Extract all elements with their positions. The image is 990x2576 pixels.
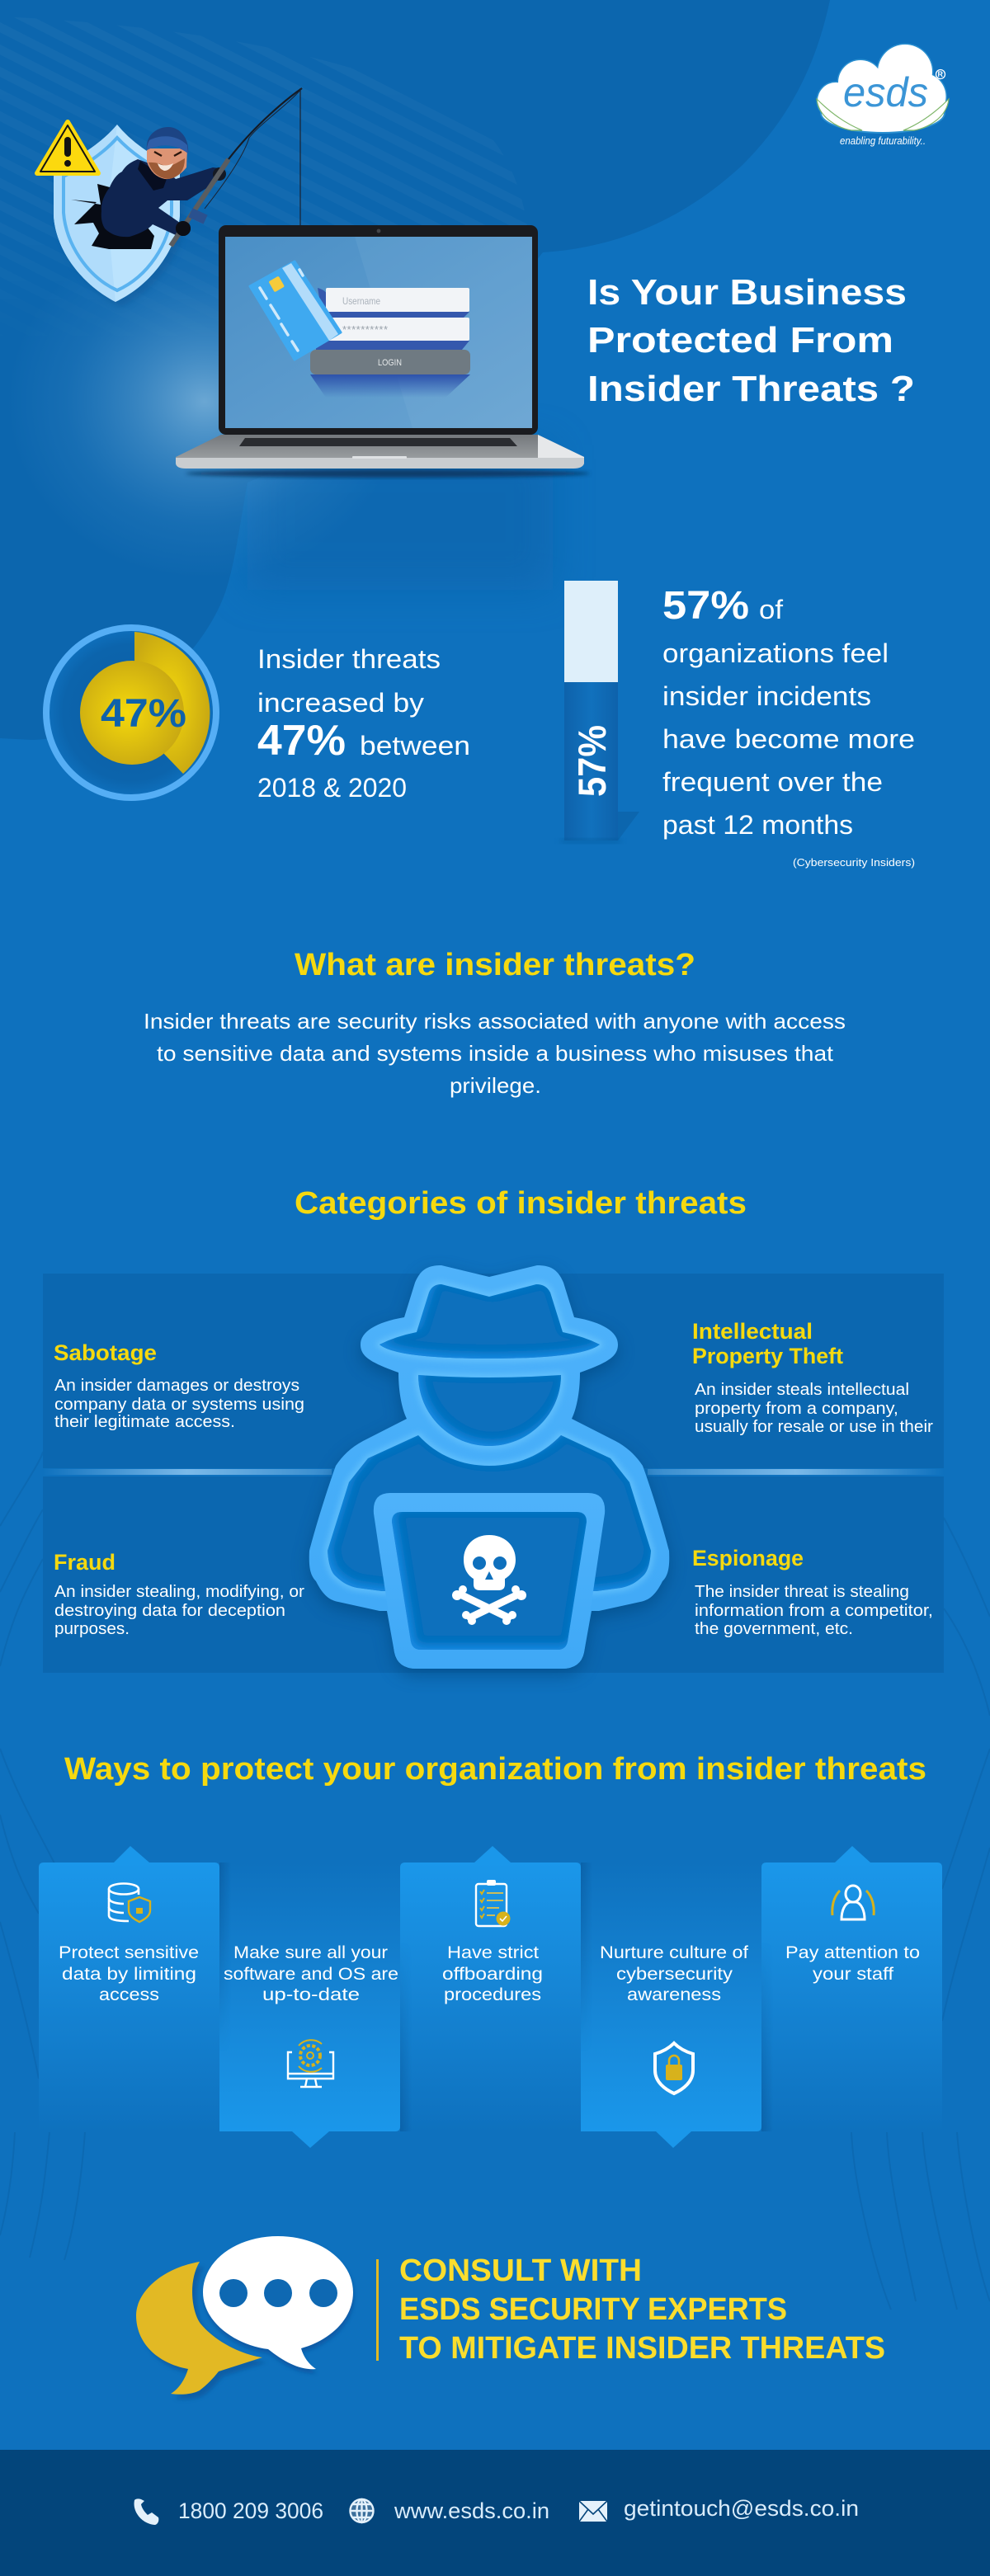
call to action: CONSULT WITH bbox=[399, 2253, 642, 2288]
stat text: 47% increase: 47% bbox=[257, 717, 346, 765]
panel: fraud: destroying data for deception bbox=[54, 1602, 285, 1620]
text block: definition: Insider threats are security risks associated with anyone with access bbox=[144, 1009, 846, 1034]
text block: definition bbox=[144, 1009, 846, 1098]
panel: sabotage: their legitimate access. bbox=[54, 1413, 235, 1431]
call to action bbox=[376, 2253, 885, 2366]
panel: intellectual property theft: Intellectual bbox=[692, 1319, 813, 1344]
heading: what are insider threats: What are insider threats? bbox=[295, 948, 695, 982]
icon: database with shield bbox=[109, 1884, 150, 1922]
login form bbox=[310, 288, 470, 398]
text block: definition: to sensitive data and systems inside a business who misuses that bbox=[157, 1041, 834, 1066]
panel: sabotage: An insider damages or destroys bbox=[54, 1377, 299, 1395]
stat text: 57% of organizations: 57% bbox=[662, 584, 749, 628]
panel: sabotage: Sabotage bbox=[54, 1340, 157, 1365]
stat text: 57% of organizations: insider incidents bbox=[662, 681, 871, 711]
panel: fraud: purposes. bbox=[54, 1620, 130, 1638]
panel: fraud: An insider stealing, modifying, or bbox=[54, 1583, 304, 1601]
stat text: 57% of organizations: (Cybersecurity Insiders) bbox=[793, 856, 915, 869]
panel: espionage: The insider threat is stealing bbox=[695, 1583, 909, 1601]
panel: pay attention to staff: Pay attention to bbox=[785, 1943, 920, 1962]
panel: pay attention to staff: your staff bbox=[813, 1965, 893, 1984]
panel: intellectual property theft: Property Theft bbox=[692, 1344, 843, 1368]
panel: keep software up to date: up-to-date bbox=[262, 1985, 360, 2004]
icon: shield bbox=[54, 125, 185, 307]
icon: clipboard bbox=[476, 1880, 510, 1926]
panel: espionage: information from a competitor, bbox=[695, 1602, 933, 1620]
bar chart: 57% bbox=[561, 581, 639, 843]
panel: intellectual property theft bbox=[692, 1319, 933, 1436]
panel: intellectual property theft: property from a company, bbox=[695, 1400, 898, 1418]
call to action: ESDS SECURITY EXPERTS bbox=[399, 2292, 787, 2327]
title bbox=[587, 272, 915, 409]
panel: fraud: Fraud bbox=[54, 1550, 116, 1575]
icon: shield with padlock bbox=[655, 2043, 693, 2093]
logo: R bbox=[937, 70, 944, 78]
panel: sabotage bbox=[54, 1340, 304, 1431]
hero: shield with hacker illustration bbox=[37, 88, 302, 307]
login form: ********** bbox=[342, 323, 388, 336]
stat text: 47% increase: increased by bbox=[257, 688, 424, 718]
stat text: 57% of organizations: frequent over the bbox=[662, 767, 883, 797]
icon: skull and crossbones bbox=[452, 1535, 526, 1625]
title: Is Your Business bbox=[587, 272, 907, 313]
panel: keep software up to date: Make sure all your bbox=[233, 1943, 388, 1962]
icon: hacker figure with laptop bbox=[309, 1265, 669, 1675]
panel: fraud bbox=[54, 1550, 304, 1638]
login form: LOGIN bbox=[378, 358, 402, 368]
panel: espionage: the government, etc. bbox=[695, 1620, 853, 1638]
stat text: 57% of organizations bbox=[662, 584, 915, 869]
login form: Username bbox=[342, 295, 380, 307]
panel: sabotage: company data or systems using bbox=[54, 1396, 304, 1414]
panel: espionage: Espionage bbox=[692, 1546, 804, 1571]
icon: person bbox=[832, 1886, 874, 1919]
panel: intellectual property theft: usually for resale or use in their bbox=[695, 1418, 933, 1436]
stat text: 57% of organizations: have become more bbox=[662, 724, 915, 754]
stat text: 47% increase: 2018 & 2020 bbox=[257, 773, 407, 803]
panel: strict offboarding: offboarding bbox=[442, 1965, 543, 1984]
panel: strict offboarding bbox=[400, 1846, 581, 2131]
icon: warning triangle bbox=[37, 122, 98, 173]
stat text: 57% of organizations: organizations feel bbox=[662, 638, 889, 668]
call to action: TO MITIGATE INSIDER THREATS bbox=[399, 2331, 885, 2366]
heading: categories: Categories of insider threats bbox=[295, 1186, 747, 1221]
icon: hole in shield bbox=[71, 184, 154, 249]
panel: espionage bbox=[692, 1546, 933, 1638]
stat text: 47% increase: between bbox=[360, 731, 470, 761]
stat text: 47% increase: Insider threats bbox=[257, 644, 441, 674]
icon: credit card on hook bbox=[250, 261, 341, 360]
icon: monitor with gear bbox=[288, 2040, 333, 2087]
heading: ways to protect: Ways to protect your organization from insider threats bbox=[64, 1752, 926, 1787]
donut chart: 47% bbox=[46, 628, 216, 798]
stat text: 47% increase bbox=[257, 644, 470, 803]
panel: cybersecurity culture: cybersecurity bbox=[616, 1965, 733, 1984]
panel: protect sensitive data: data by limiting bbox=[62, 1965, 196, 1984]
panel: protect sensitive data bbox=[39, 1846, 219, 2131]
panel: categories background bbox=[43, 1274, 944, 1673]
icon: hacker bbox=[101, 127, 226, 237]
icon: envelope bbox=[579, 2501, 607, 2522]
bar chart: 57%: 57% bbox=[570, 725, 614, 797]
logo: enabling futurability.. bbox=[840, 134, 926, 147]
text: website: www.esds.co.in bbox=[394, 2498, 549, 2523]
panel: pay attention to staff bbox=[761, 1846, 942, 2131]
panel: strict offboarding: procedures bbox=[444, 1985, 541, 2004]
title: Protected From bbox=[587, 320, 893, 360]
donut chart: 47%: 47% bbox=[101, 692, 186, 736]
footer bbox=[0, 2450, 990, 2576]
panel: keep software up to date bbox=[219, 1863, 400, 2148]
text: phone: 1800 209 3006 bbox=[178, 2498, 323, 2523]
panel: cybersecurity culture bbox=[581, 1863, 761, 2148]
text block: definition: privilege. bbox=[450, 1073, 541, 1098]
panel: cybersecurity culture: awareness bbox=[627, 1985, 721, 2004]
logo bbox=[817, 43, 949, 147]
panel: cybersecurity culture: Nurture culture of bbox=[600, 1943, 748, 1962]
icon: fishing rod and line bbox=[171, 88, 302, 265]
hero: laptop bbox=[176, 225, 590, 478]
logo: esds bbox=[843, 69, 928, 115]
text: email: getintouch@esds.co.in bbox=[624, 2496, 859, 2521]
panel: protect sensitive data: Protect sensitive bbox=[59, 1943, 199, 1962]
icon: globe bbox=[350, 2499, 374, 2522]
stat text: 57% of organizations: of bbox=[759, 595, 783, 624]
title: Insider Threats ? bbox=[587, 369, 915, 409]
stat text: 57% of organizations: past 12 months bbox=[662, 810, 853, 840]
icon: phone bbox=[134, 2498, 158, 2525]
panel: protect sensitive data: access bbox=[99, 1985, 159, 2004]
panel: keep software up to date: software and OS are bbox=[224, 1965, 398, 1984]
panel: intellectual property theft: An insider steals intellectual bbox=[695, 1381, 909, 1399]
icon: chat bubbles bbox=[136, 2236, 354, 2399]
panel: strict offboarding: Have strict bbox=[447, 1943, 539, 1962]
